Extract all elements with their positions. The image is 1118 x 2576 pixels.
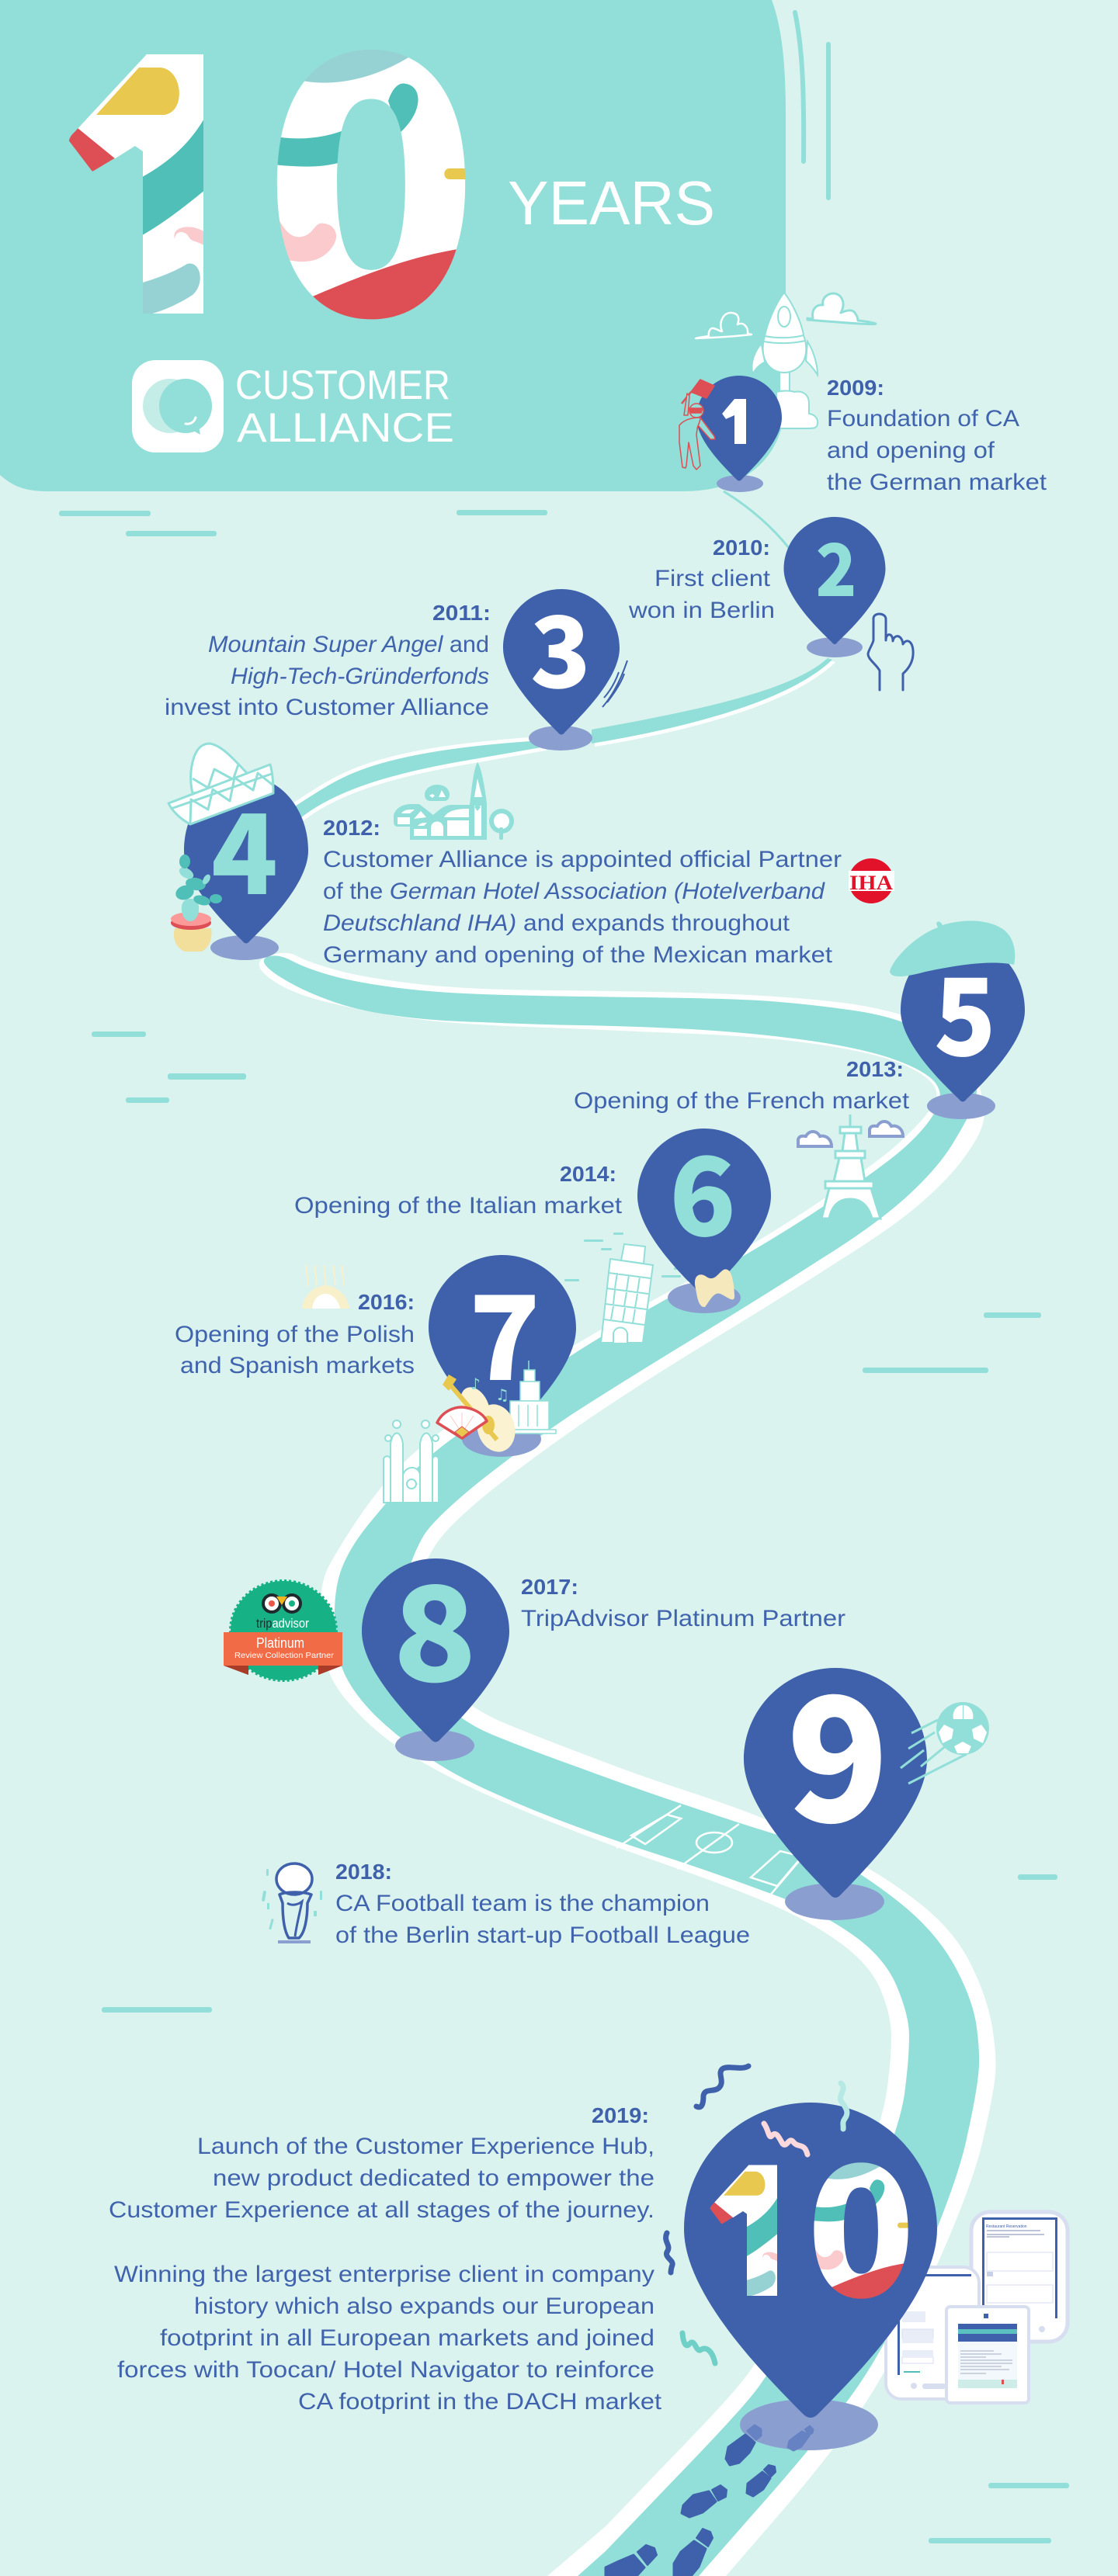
pin 10 number (710, 2162, 908, 2299)
device: survey tablet (886, 2267, 979, 2399)
text: 2018: 2018: (335, 1860, 392, 1884)
text: 2009: Foundation of CA (827, 406, 1019, 432)
text: 2009: 2009: (827, 376, 884, 400)
icon: trophy (262, 1864, 322, 1943)
text: 2016 (175, 1290, 415, 1378)
text: 2012: 2012: (323, 816, 380, 840)
icon: music notes: ♫ (495, 1385, 509, 1404)
icon: clouds near Eiffel tower (798, 1122, 903, 1146)
text: 2010 (628, 536, 775, 623)
text: 2009: and opening of (827, 438, 995, 463)
icon: IHA logo: IHA (849, 872, 893, 894)
logo wordmark: CUSTOMER (235, 362, 450, 408)
icon: footsteps (606, 2425, 814, 2576)
text: 2012: Deutschland IHA) and expands throughout (323, 910, 790, 936)
pin 8 (362, 1529, 509, 1761)
icon: football with speed lines (901, 1702, 989, 1784)
text: 2011 (165, 601, 491, 720)
pin 5 (901, 931, 1025, 1119)
icon: hand fan (437, 1407, 487, 1438)
text: 2018 (335, 1860, 750, 1948)
logo wordmark (235, 362, 454, 451)
icon: music notes (470, 1375, 509, 1404)
icon: sombrero (168, 744, 273, 824)
text: 2009 (827, 376, 1047, 495)
icon: Sagrada Familia (384, 1420, 439, 1503)
pin 9 (744, 1621, 927, 1920)
icon: guitar (443, 1375, 520, 1456)
icon: beret (890, 920, 1015, 976)
tree (489, 809, 514, 840)
icon: flag bearer (679, 380, 715, 470)
road: white edge, pin 4 to bottom (259, 953, 995, 2576)
text: 2016: 2016: (358, 1290, 415, 1314)
icon: cactus (171, 855, 222, 952)
text: 2012: Germany and opening of the Mexican market (323, 942, 833, 968)
icon: music notes: ♪ (470, 1375, 481, 1393)
text: 2019: Winning the largest enterprise client in company (114, 2262, 654, 2287)
text: 2013 (574, 1057, 910, 1114)
pin 3 (503, 574, 620, 751)
text: 2019: Customer Experience at all stages of the journey. (109, 2197, 654, 2223)
badge: TripAdvisor Platinum: tripadvisor (256, 1616, 309, 1631)
text: 2019: history which also expands our European (194, 2293, 654, 2319)
road: teal surface, pin 4 to bottom (264, 955, 979, 2576)
text: 2014 (294, 1162, 623, 1219)
pin 5: 5 (934, 931, 996, 1087)
badge: TripAdvisor Platinum (224, 1581, 342, 1680)
logo icon (132, 360, 224, 452)
text: 2011: 2011: (432, 601, 491, 625)
icon: pointing hand (868, 614, 913, 690)
text: 2018: of the Berlin start-up Football League (335, 1922, 750, 1948)
text: 2018: CA Football team is the champion (335, 1891, 710, 1916)
text: 2019: Launch of the Customer Experience Hub, (197, 2134, 654, 2159)
logo wordmark: ALLIANCE (237, 405, 454, 451)
text: 2014: 2014: (560, 1162, 616, 1186)
pin 7 (429, 1245, 576, 1457)
badge: TripAdvisor Platinum: Review Collection Partner (234, 1651, 335, 1660)
pin 4: 4 (211, 766, 278, 927)
pin 4 (184, 766, 308, 960)
text: 2017: 2017: (521, 1575, 578, 1599)
text: 2012: Customer Alliance is appointed official Partner (323, 847, 842, 872)
pin 10 (684, 2103, 937, 2450)
icon: village (394, 762, 514, 840)
pin 2 (784, 512, 885, 657)
bush (425, 785, 450, 801)
big 10 heading (68, 50, 466, 320)
icon: rocket (752, 293, 818, 428)
text: 2013: Opening of the French market (574, 1088, 910, 1114)
road: segment pin 3 to pin 4 (287, 739, 543, 821)
text: 2019: new product dedicated to empower the (213, 2165, 654, 2191)
icon: bow-tie pasta (695, 1269, 734, 1307)
device: form tablet (971, 2212, 1068, 2342)
icon: Palace of Culture (510, 1361, 556, 1434)
YEARS label: YEARS (508, 168, 715, 237)
pin 9: 9 (786, 1621, 889, 1871)
text: 2014: Opening of the Italian market (294, 1193, 623, 1219)
pin 6: 6 (669, 1111, 736, 1267)
road: segment pin 2 to pin 3 (592, 658, 835, 747)
text: 2016: and Spanish markets (180, 1353, 415, 1378)
pin 1 (696, 376, 782, 492)
logo: Customer Alliance (132, 360, 454, 452)
text: 2019 (109, 2103, 662, 2415)
device: form tablet: Restaurant Reservation (986, 2224, 1027, 2229)
text: 2012 (323, 816, 842, 968)
pin 3: 3 (530, 574, 591, 716)
text: 2017 (521, 1575, 845, 1631)
pin 6 (637, 1111, 771, 1313)
icon: Eiffel tower (821, 1115, 880, 1219)
device: email phone (946, 2307, 1029, 2403)
icon: product devices (886, 2212, 1068, 2403)
header panel (0, 0, 786, 491)
text: 2019: forces with Toocan/ Hotel Navigator to reinforce (117, 2357, 654, 2383)
text: 2009: the German market (827, 470, 1047, 495)
text: 2019: CA footprint in the DACH market (298, 2389, 662, 2415)
text: 2010: First client (654, 566, 771, 591)
text: 2012: of the German Hotel Association (Hotelverband (323, 879, 825, 904)
text: 2011: Mountain Super Angel and (208, 632, 489, 657)
text: 2010: won in Berlin (628, 598, 775, 623)
icon: football pitch lines (616, 1805, 807, 1902)
text: 2019: footprint in all European markets and joined (160, 2325, 654, 2351)
icon: pierogi with steam (302, 1265, 349, 1309)
text: 2011: High-Tech-Gründerfonds (231, 664, 489, 689)
text: 2016: Opening of the Polish (175, 1322, 415, 1347)
icon: leaning tower of Pisa (601, 1244, 653, 1343)
icon: left cloud (696, 313, 752, 338)
road: thin start between pin 1 and pin 2 (724, 491, 800, 563)
icon: squiggle confetti (666, 2066, 847, 2363)
pin 2: 2 (815, 512, 857, 617)
text: 2011: invest into Customer Alliance (165, 695, 489, 720)
text: 2017: TripAdvisor Platinum Partner (521, 1606, 845, 1631)
icon: right cloud (807, 293, 876, 324)
badge: TripAdvisor Platinum: Platinum (256, 1635, 304, 1651)
text: 2013: 2013: (846, 1057, 904, 1081)
pin 7: 7 (469, 1245, 540, 1414)
text: 2010: 2010: (713, 536, 770, 560)
text: 2019: 2019: (592, 2103, 649, 2127)
icon: motion lines (602, 660, 627, 707)
pin 8: 8 (393, 1529, 477, 1719)
icon: IHA logo (849, 858, 894, 903)
